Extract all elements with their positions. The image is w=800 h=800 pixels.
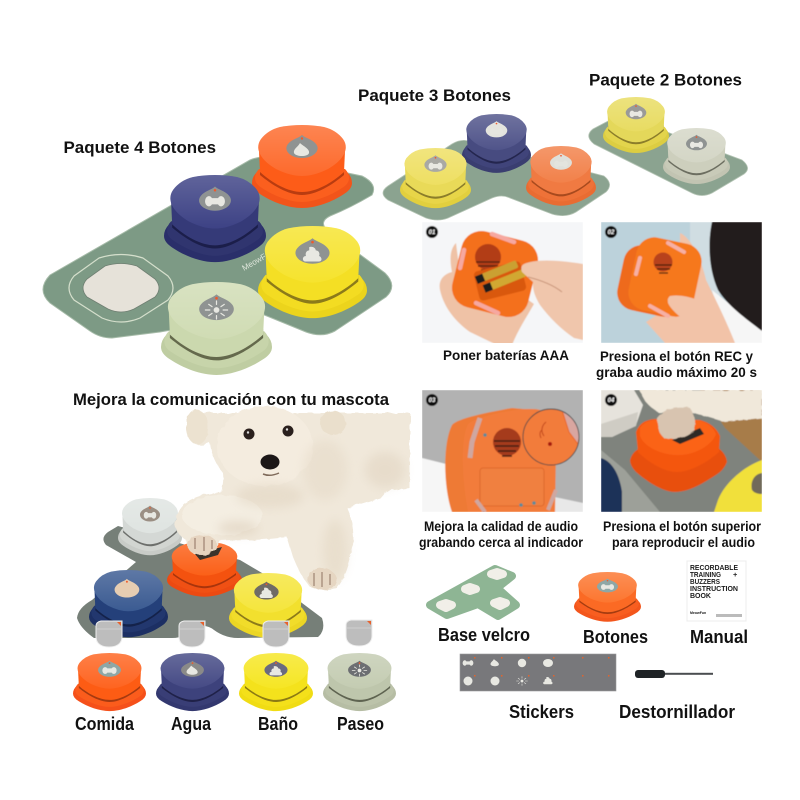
dog paw — [640, 390, 762, 439]
product: 4 button pack — [43, 125, 392, 375]
orange button — [630, 419, 727, 492]
navy button — [164, 175, 266, 262]
grey button — [663, 128, 730, 184]
item: manual: BOOK — [690, 591, 712, 600]
orange button — [167, 542, 242, 597]
batteries — [475, 259, 526, 294]
item: manual: MeowFun — [690, 611, 706, 615]
photo 03: microphone indicator — [422, 390, 585, 512]
step badge 04 — [605, 394, 617, 406]
item: manual: + — [733, 570, 738, 579]
step badge 01 — [426, 226, 438, 238]
left hand — [440, 243, 534, 345]
step badge 03 — [426, 394, 438, 406]
navy button — [462, 114, 531, 173]
product: 2 button pack — [589, 97, 748, 196]
label: Paseo: Paseo — [337, 714, 384, 734]
label: Baño: Baño — [258, 714, 298, 734]
heading: Mejora la comunicación: Mejora la comunicación con tu mascota — [73, 391, 390, 409]
sticker tabs — [96, 620, 372, 647]
back of hand — [646, 233, 735, 343]
heading: Paquete 2 Botones: Paquete 2 Botones — [589, 72, 742, 90]
item: manual: INSTRUCTION — [690, 584, 738, 593]
mat — [383, 140, 610, 220]
device — [452, 230, 539, 318]
label: Stickers: Stickers — [509, 702, 574, 722]
right hand — [521, 260, 583, 340]
photo: dog with buttons — [77, 406, 410, 638]
label: Agua: Agua — [171, 714, 212, 734]
yellow button — [714, 460, 762, 512]
dark slot under paw — [195, 547, 222, 560]
step badge 02 — [605, 226, 617, 238]
mat under dog — [77, 526, 323, 638]
navy button — [601, 458, 622, 512]
yellow button — [258, 226, 367, 318]
step badge 03: 03 — [429, 398, 436, 404]
front paws — [187, 535, 336, 590]
photo 01: batteries — [422, 222, 583, 345]
caption step 2: Presiona el botón REC y — [600, 349, 753, 364]
item: screwdriver — [635, 670, 713, 678]
dog face — [244, 426, 294, 475]
item: manual — [687, 561, 746, 621]
thumb — [666, 294, 694, 317]
white button — [118, 498, 182, 555]
orange button — [526, 146, 596, 206]
navy button — [89, 570, 168, 637]
step badge 02: 02 — [608, 230, 615, 236]
caption step 3: grabando cerca al indicador — [419, 535, 584, 550]
caption step 1: Poner baterías AAA — [443, 348, 569, 363]
product: 3 button pack — [383, 114, 610, 220]
caption step 2 — [596, 349, 757, 380]
label: Base velcro: Base velcro — [438, 625, 530, 645]
velcro pad — [69, 254, 173, 322]
white shirt — [712, 290, 762, 343]
dog body — [175, 406, 410, 590]
label: Manual: Manual — [690, 627, 748, 647]
magnified inset — [523, 409, 585, 465]
button: Comida — [73, 653, 146, 711]
sage green button — [161, 282, 272, 375]
orange button — [252, 125, 352, 208]
white button — [601, 390, 644, 424]
step badge 01: 01 — [429, 230, 436, 236]
fur shading — [218, 440, 405, 580]
button: Baño — [239, 653, 313, 711]
item: stickers sheet — [460, 654, 616, 691]
yellow button — [229, 573, 307, 638]
hair — [710, 222, 762, 331]
caption step 3: Mejora la calidad de audio — [424, 519, 578, 534]
button: Paseo — [323, 653, 396, 711]
mat brand text: MeowFun — [240, 247, 275, 273]
button: Agua — [156, 653, 229, 711]
photo 02: record button — [601, 222, 762, 343]
device — [616, 236, 702, 318]
yellow button — [603, 97, 669, 153]
caption step 4 — [603, 519, 762, 550]
caption step 4: Presiona el botón superior — [603, 519, 762, 534]
photo 04: paw pressing — [601, 390, 762, 512]
toe lines — [195, 537, 330, 587]
item: manual: TRAINING — [690, 570, 721, 579]
caption step 2: graba audio máximo 20 s — [596, 365, 757, 380]
item: velcro base — [430, 569, 516, 616]
step badge 04: 04 — [608, 398, 615, 404]
mat — [589, 118, 748, 196]
label: Comida: Comida — [75, 714, 135, 734]
device — [445, 408, 556, 512]
item: orange button — [574, 572, 641, 622]
item: manual: RECORDABLE — [690, 563, 738, 572]
caption step 3 — [419, 519, 584, 550]
label: Destornillador: Destornillador — [619, 702, 735, 722]
caption step 4: para reproducir el audio — [612, 535, 755, 550]
yellow button — [400, 148, 471, 208]
label: Botones: Botones — [583, 627, 648, 647]
heading: Paquete 3 Botones: Paquete 3 Botones — [358, 87, 511, 105]
heading: Paquete 4 Botones: Paquete 4 Botones — [64, 139, 216, 157]
velcro mat — [43, 157, 392, 338]
item: manual: BUZZERS — [690, 577, 720, 586]
